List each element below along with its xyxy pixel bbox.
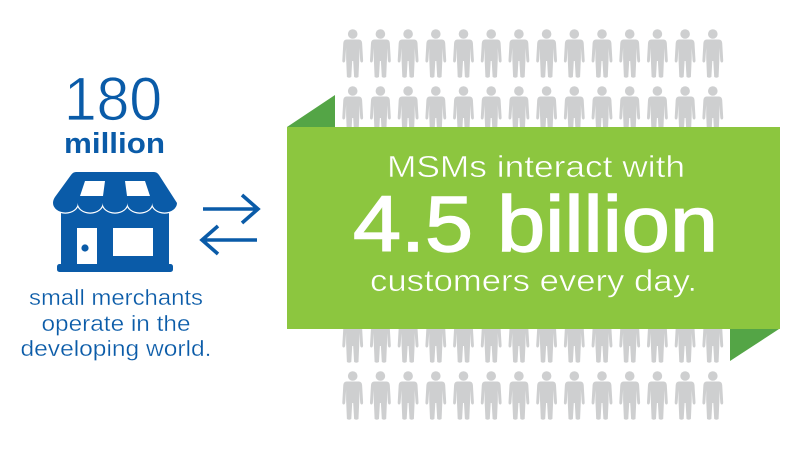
- banner text: closing line: customers every day.: [370, 263, 697, 298]
- subheading: million: million: [64, 128, 165, 160]
- arrows: two-way exchange: [202, 195, 258, 254]
- text: small merchants description: operate in the: [42, 311, 190, 336]
- ribbon fold: top left: [287, 95, 335, 127]
- green banner: [287, 127, 780, 329]
- text: small merchants description: [20, 285, 212, 361]
- text: small merchants description: small merchants: [29, 285, 203, 310]
- crowd of people icons: [342, 29, 723, 420]
- text: small merchants description: developing world.: [20, 336, 212, 361]
- icon: storefront: [53, 172, 177, 272]
- banner text: 4.5 billion: 4.5 billion: [353, 179, 718, 268]
- headline number: 180: 180: [64, 65, 162, 133]
- ribbon fold: bottom right: [730, 329, 779, 361]
- banner text: intro line: MSMs interact with: [387, 149, 685, 184]
